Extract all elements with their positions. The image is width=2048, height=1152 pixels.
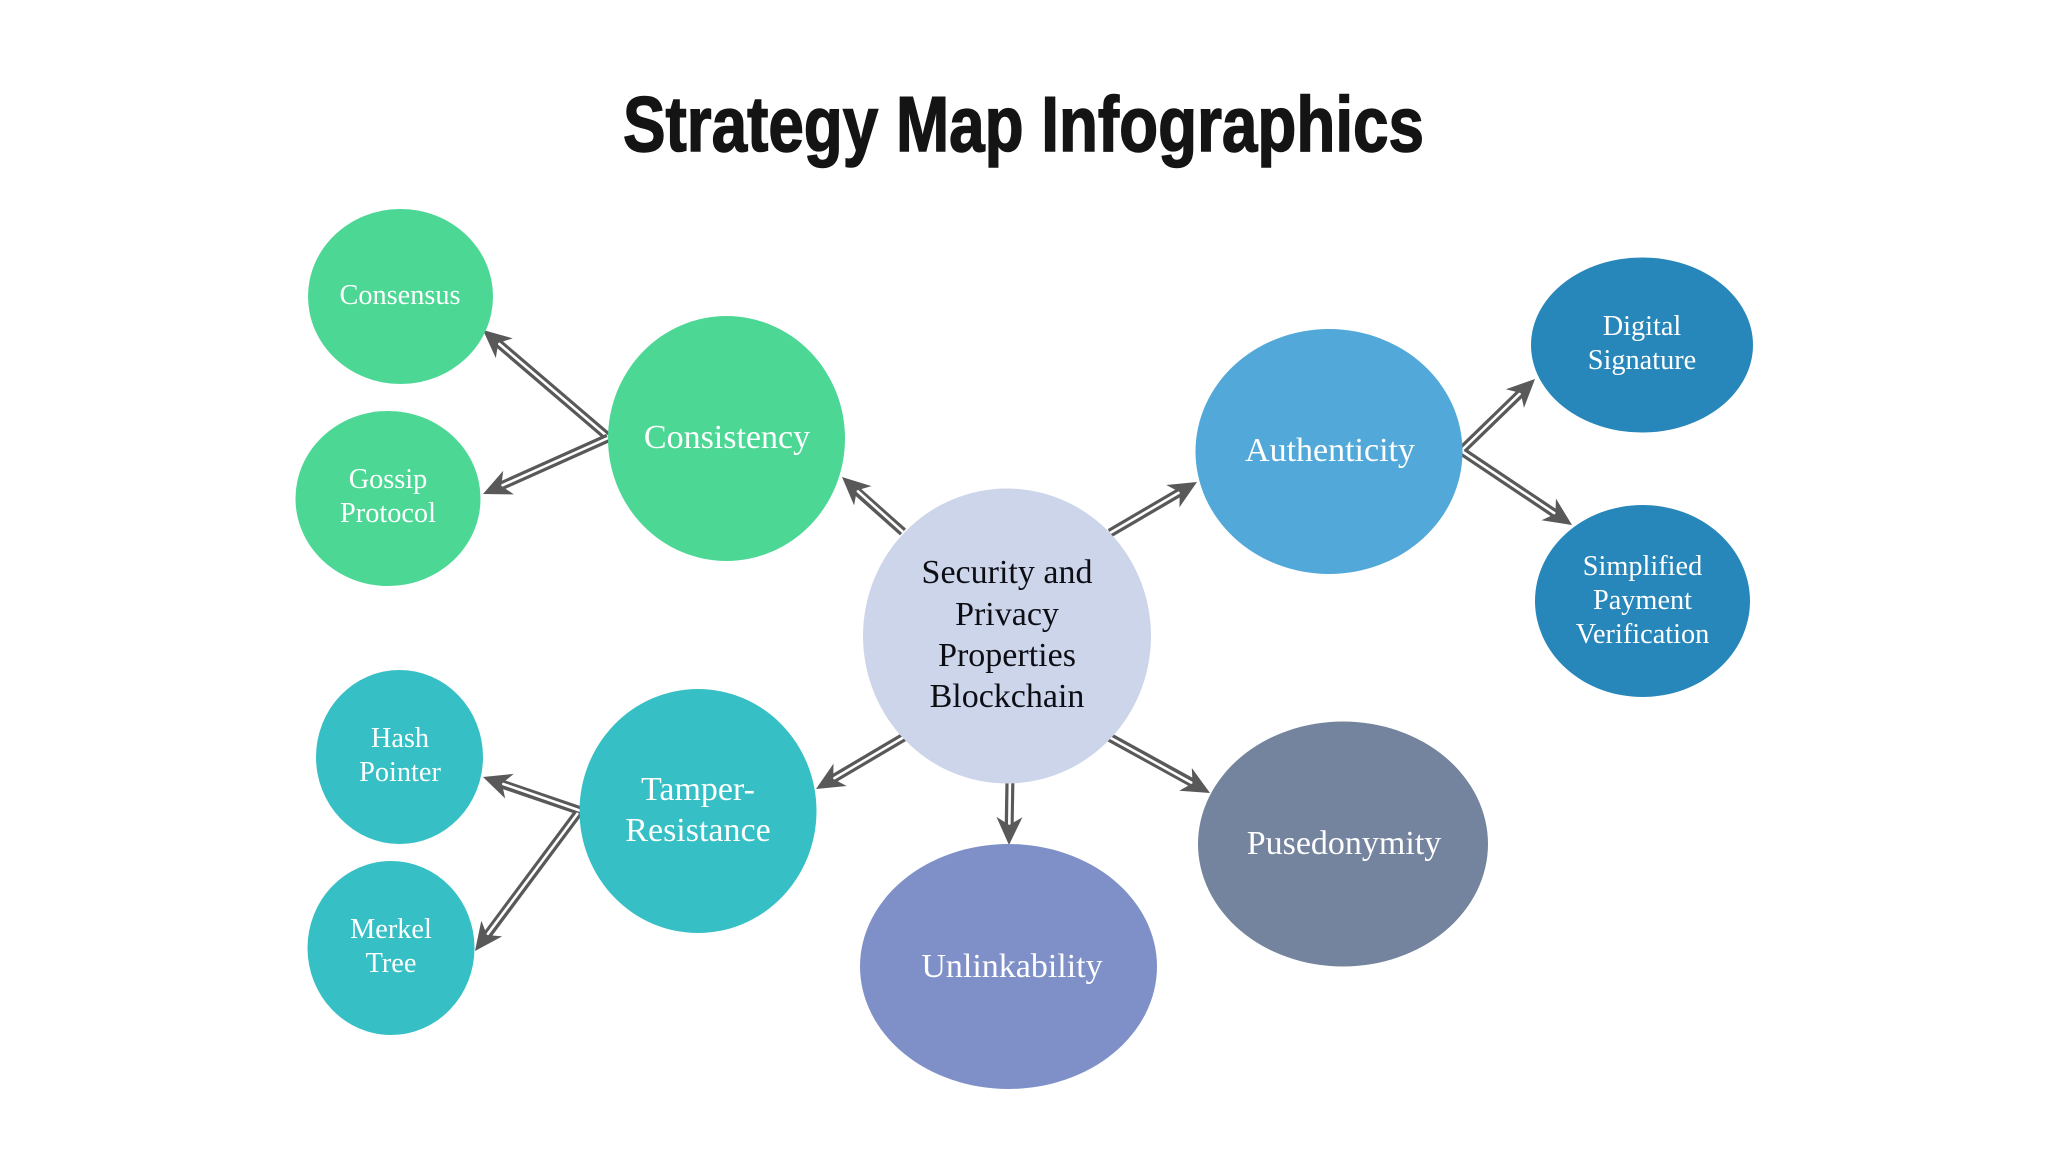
node: Simplified Payment Verification [1535,505,1750,697]
arrow: Consistency to Gossip Protocol [483,438,608,494]
node: Hash Pointer: Hash [371,723,429,754]
node: centre Security and Privacy Properties Blockchain: Properties [938,637,1076,674]
node: Authenticity: Authenticity [1245,432,1415,469]
node: Gossip Protocol: Protocol [340,498,436,529]
node: Simplified Payment Verification: Simplified [1583,551,1702,582]
arrow: Consistency to Consensus [483,330,608,437]
node: Pusedonymity [1198,722,1488,966]
node: Pusedonymity: Pusedonymity [1247,825,1441,862]
arrow: Authenticity to Digital Signature [1463,379,1535,449]
arrow: centre to Tamper-Resistance [816,737,904,789]
node: Simplified Payment Verification: Payment [1593,585,1692,616]
node: centre Security and Privacy Properties Blockchain: Security and [922,554,1092,591]
node: Gossip Protocol [296,411,480,586]
node: Unlinkability: Unlinkability [921,948,1103,985]
arrow: Tamper-Resistance to Merkel Tree [475,813,578,951]
node: Simplified Payment Verification: Verification [1576,619,1709,650]
node: centre Security and Privacy Properties Blockchain: Blockchain [930,678,1084,715]
node: Consistency: Consistency [644,419,810,456]
node: centre Security and Privacy Properties Blockchain: Privacy [955,596,1059,633]
node: Digital Signature: Digital [1603,311,1681,342]
arrow: Tamper-Resistance to Hash Pointer [483,777,581,811]
node: Merkel Tree [308,861,474,1035]
node: Consistency [608,316,845,561]
arrow: Authenticity to Simplified Payment Verification [1463,452,1572,525]
arrow: centre to Unlinkability [1009,777,1010,845]
arrow: centre to Pusedonymity [1109,737,1210,793]
title: Strategy Map Infographics [623,80,1424,168]
node: Gossip Protocol: Gossip [349,464,427,495]
node: Authenticity [1196,329,1462,574]
node: Tamper-Resistance: Resistance [625,812,771,849]
arrow: centre to Authenticity [1110,482,1197,533]
node: Hash Pointer: Pointer [359,757,441,788]
node: Merkel Tree: Merkel [350,914,432,945]
node: Unlinkability [860,844,1157,1089]
node: Hash Pointer [316,670,483,844]
node: Consensus [308,209,493,384]
node: Tamper-Resistance: Tamper- [641,771,755,808]
node: Consensus: Consensus [339,280,461,311]
node: Merkel Tree: Tree [366,948,416,979]
node: centre Security and Privacy Properties Blockchain [863,488,1151,784]
node: Digital Signature: Signature [1588,345,1696,376]
node: Tamper-Resistance [580,689,816,933]
arrow: centre to Consistency [842,477,903,532]
node: Digital Signature [1531,258,1753,432]
